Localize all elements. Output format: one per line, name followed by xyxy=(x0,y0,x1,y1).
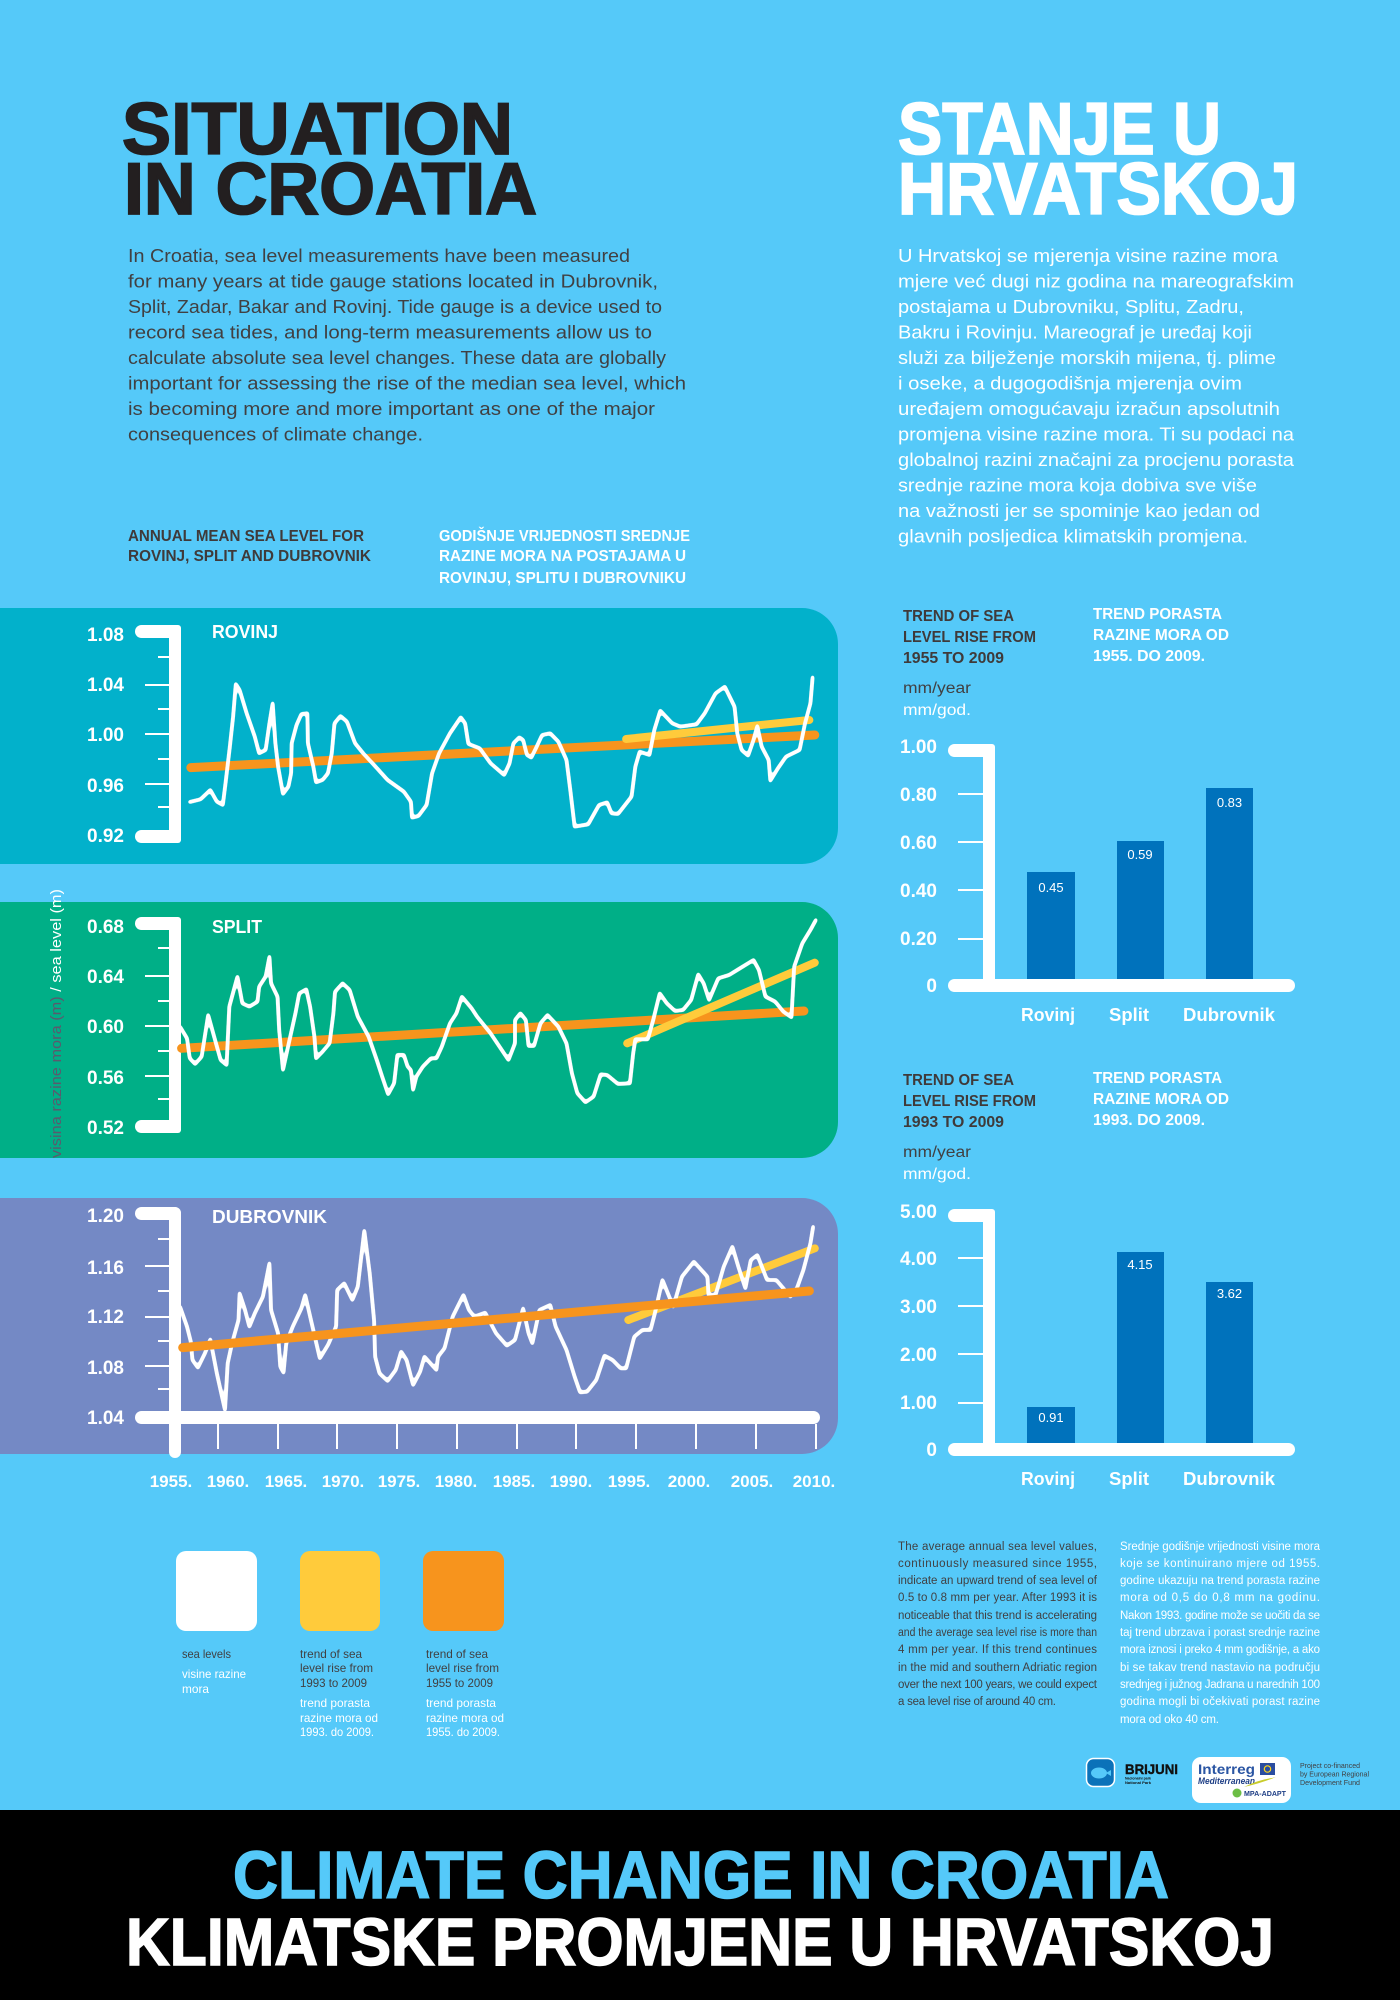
axis labels: Dubrovnik: 1.12 xyxy=(87,1307,124,1328)
y axis labels: 1.00 xyxy=(900,1393,937,1414)
y axis labels: 3.00 xyxy=(900,1297,937,1318)
text block: English summary xyxy=(898,1541,1098,1708)
legend: trend 1955 to 2009: level rise from xyxy=(426,1661,499,1675)
text block: Croatian summary: Srednje godišnje vrijednosti visine mora xyxy=(1120,1541,1321,1553)
axis labels: Dubrovnik: 1.04 xyxy=(87,1408,124,1429)
text block: Croatian introduction: uređajem omogućavaju izračun apsolutnih xyxy=(898,398,1280,419)
text block: Croatian introduction: na važnosti jer se spominje kao jedan od xyxy=(898,500,1260,521)
axis labels: Dubrovnik: 1.20 xyxy=(87,1206,124,1227)
legend: trend 1993 to 2009: 1993. do 2009. xyxy=(300,1725,374,1739)
text block: Croatian introduction: Bakru i Rovinju. Mareograf je uređaj koji xyxy=(898,322,1252,342)
text block: English introduction: for many years at tide gauge stations located in Dubrovnik, xyxy=(128,270,658,292)
unit label: mm per year, second chart xyxy=(903,1144,971,1183)
x axis labels: years: 2005. xyxy=(731,1472,773,1491)
text block: Croatian introduction: glavnih posljedica klimatskih promjena. xyxy=(898,526,1248,546)
heading: annual mean sea level (English) xyxy=(128,528,372,565)
x axis labels: years: 2010. xyxy=(793,1472,835,1491)
panel: Dubrovnik line chart xyxy=(0,1198,838,1458)
legend: sea levels xyxy=(176,1551,257,1696)
text block: Croatian summary: godina mogli bi očekivati porast razine xyxy=(1120,1696,1320,1708)
bar values: 4.15 xyxy=(1127,1257,1153,1272)
text block: Croatian introduction: promjena visine razine mora. Ti su podaci na xyxy=(898,424,1295,444)
logo: Interreg Mediterranean MPA-ADAPT: Mediterranean xyxy=(1198,1776,1255,1786)
text block: English summary: 4 mm per year. If this trend continues xyxy=(898,1644,1097,1656)
legend: trend 1993 to 2009 xyxy=(300,1551,380,1739)
logo: Brijuni National Park xyxy=(1086,1758,1178,1786)
text block: Croatian summary: mora iznosi i preko 4 mm godišnje, a ako xyxy=(1120,1644,1320,1656)
text block: Croatian introduction: globalnoj razini značajni za procjenu porasta xyxy=(898,449,1295,470)
category labels: Split xyxy=(1109,1469,1149,1489)
series: Rovinj trend and sea level lines xyxy=(190,677,815,827)
legend: trend 1993 to 2009: razine mora od xyxy=(300,1711,378,1725)
axis labels: Split: 0.52 xyxy=(87,1118,124,1139)
legend: sea levels: sea levels xyxy=(182,1647,231,1661)
logo: Brijuni National Park: Nacionalni park xyxy=(1125,1776,1152,1780)
panel: Split line chart xyxy=(0,902,838,1158)
bars xyxy=(1027,788,1253,980)
x axis labels: years xyxy=(150,1472,835,1491)
unit label: mm per year, second chart: mm/god. xyxy=(903,1166,971,1183)
heading: annual mean sea level (Croatian) xyxy=(439,527,690,587)
legend: sea levels: visine razine xyxy=(182,1667,246,1681)
text block: English introduction: record sea tides, and long-term measurements allow us to xyxy=(128,322,652,342)
heading: trend 1955 to 2009 (English): 1955 TO 2009 xyxy=(903,650,1004,667)
category labels xyxy=(1021,1005,1276,1025)
y axis labels xyxy=(900,1202,937,1461)
y axis labels: 2.00 xyxy=(900,1345,937,1366)
axis labels: Split: 0.64 xyxy=(87,967,124,988)
bar values: 0.59 xyxy=(1127,847,1153,862)
y axis labels: 0.40 xyxy=(900,881,937,902)
y axis labels: 0.60 xyxy=(900,833,937,854)
legend: trend 1955 to 2009: razine mora od xyxy=(426,1711,504,1725)
legend: trend 1955 to 2009: trend porasta xyxy=(426,1696,496,1710)
legend: sea levels: mora xyxy=(182,1682,209,1696)
title: Stanje u Hrvatskoj: HRVATSKOJ xyxy=(898,149,1298,230)
heading: trend 1955 to 2009 (Croatian): TREND PORASTA xyxy=(1093,606,1222,623)
text: co-financing note: by European Regional xyxy=(1300,1770,1369,1778)
label: Rovinj: ROVINJ xyxy=(212,622,278,642)
text block: Croatian introduction: mjere već dugi niz godina na mareografskim xyxy=(898,270,1294,292)
heading: trend 1955 to 2009 (English): TREND OF SEA xyxy=(903,608,1014,625)
heading: trend 1993 to 2009 (English): LEVEL RISE FROM xyxy=(903,1093,1036,1110)
y axis labels xyxy=(900,737,937,997)
heading: trend 1993 to 2009 (Croatian): TREND PORASTA xyxy=(1093,1070,1222,1087)
heading: annual mean sea level (Croatian): ROVINJU, SPLITU I DUBROVNIKU xyxy=(439,570,686,587)
axis labels: Dubrovnik xyxy=(87,1206,124,1429)
unit label: mm per year: mm/year xyxy=(903,680,971,697)
axis labels: Rovinj xyxy=(87,625,124,847)
text block: Croatian introduction: i oseke, a dugogodišnja mjerenja ovim xyxy=(898,372,1242,394)
axis: Rovinj y axis xyxy=(135,625,181,843)
title: Situation in Croatia xyxy=(122,89,537,230)
y axis labels: 0 xyxy=(926,1440,937,1461)
axis labels: Rovinj: 1.00 xyxy=(87,725,124,746)
category labels xyxy=(1021,1469,1276,1489)
heading: trend 1955 to 2009 (English) xyxy=(903,608,1036,667)
text block: English summary: indicate an upward trend of sea level of xyxy=(898,1575,1098,1587)
legend: trend 1993 to 2009: trend porasta xyxy=(300,1696,370,1710)
unit label: mm per year xyxy=(903,680,971,719)
text: co-financing note xyxy=(1300,1761,1369,1787)
heading: annual mean sea level (English): ROVINJ, SPLIT AND DUBROVNIK xyxy=(128,548,372,565)
title: Stanje u Hrvatskoj: STANJE U xyxy=(898,89,1221,170)
bar values: 0.91 xyxy=(1038,1410,1064,1425)
y axis labels: 1.00 xyxy=(900,737,937,758)
text block: Croatian summary: taj trend ubrzava i porast srednje razine xyxy=(1120,1627,1320,1639)
heading: trend 1993 to 2009 (Croatian) xyxy=(1093,1070,1229,1129)
heading: trend 1993 to 2009 (English): 1993 TO 2009 xyxy=(903,1114,1004,1131)
legend: trend 1955 to 2009: 1955 to 2009 xyxy=(426,1676,493,1690)
text block: English summary: noticeable that this trend is accelerating xyxy=(898,1610,1097,1622)
text block: English summary: and the average sea level rise is more than xyxy=(898,1627,1097,1639)
footer title: Croatian: KLIMATSKE PROMJENE U HRVATSKOJ xyxy=(126,1905,1274,1980)
text block: Croatian introduction: srednje razine mora koja dobiva sve više xyxy=(898,474,1257,496)
bar values xyxy=(1038,1257,1242,1425)
axis labels: Dubrovnik: 1.08 xyxy=(87,1358,124,1379)
axis labels: Rovinj: 1.04 xyxy=(87,675,124,696)
footer title: English: CLIMATE CHANGE IN CROATIA xyxy=(233,1838,1169,1913)
axis labels: Split: 0.68 xyxy=(87,917,124,938)
heading: trend 1955 to 2009 (Croatian): 1955. DO 2009. xyxy=(1093,648,1205,665)
label: Split: SPLIT xyxy=(212,917,262,937)
text block: Croatian summary: mora od 0,5 do 0,8 mm na godinu. xyxy=(1120,1592,1320,1604)
bar values: 3.62 xyxy=(1217,1286,1242,1301)
heading: trend 1955 to 2009 (Croatian) xyxy=(1093,606,1229,665)
axis labels: Rovinj: 0.92 xyxy=(87,826,124,847)
x axis labels: years: 1955. xyxy=(150,1472,192,1491)
heading: annual mean sea level (Croatian): GODIŠNJE VRIJEDNOSTI SREDNJE xyxy=(439,527,690,545)
category labels: Dubrovnik xyxy=(1183,1469,1276,1489)
logo: Interreg Mediterranean MPA-ADAPT xyxy=(1192,1757,1291,1803)
heading: trend 1993 to 2009 (English) xyxy=(903,1072,1036,1131)
title: Situation in Croatia: IN CROATIA xyxy=(124,149,537,230)
text block: Croatian introduction: postajama u Dubrovniku, Splitu, Zadru, xyxy=(898,296,1244,317)
legend: trend 1993 to 2009: trend of sea xyxy=(300,1647,362,1661)
text block: English introduction xyxy=(128,245,686,444)
category labels: Dubrovnik xyxy=(1183,1005,1276,1025)
unit label: mm per year: mm/god. xyxy=(903,702,971,719)
bar values xyxy=(1038,795,1242,895)
axis labels: Split xyxy=(87,917,124,1139)
x axis labels: years: 1980. xyxy=(435,1472,477,1491)
x axis labels: years: 1965. xyxy=(265,1472,307,1491)
axis labels: Rovinj: 0.96 xyxy=(87,776,124,797)
heading: trend 1955 to 2009 (Croatian): RAZINE MORA OD xyxy=(1093,627,1229,644)
logo: Interreg Mediterranean MPA-ADAPT: MPA-ADAPT xyxy=(1244,1789,1286,1798)
text block: English introduction: Split, Zadar, Bakar and Rovinj. Tide gauge is a device used to xyxy=(128,296,662,317)
text block: Croatian introduction xyxy=(898,245,1295,546)
text block: Croatian summary: koje se kontinuirano mjere od 1955. xyxy=(1120,1558,1320,1570)
logo: Brijuni National Park: National Park xyxy=(1125,1780,1152,1785)
text: co-financing note: Project co-financed xyxy=(1300,1761,1360,1770)
x axis labels: years: 1975. xyxy=(378,1472,420,1491)
text block: English introduction: is becoming more and more important as one of the major xyxy=(128,398,655,419)
axis: Split y axis xyxy=(135,917,181,1133)
category labels: Rovinj xyxy=(1021,1469,1075,1489)
text block: English summary: a sea level rise of around 40 cm. xyxy=(898,1696,1056,1708)
axis title: sea level in metres: visina razine mora (m) / sea level (m) xyxy=(48,889,65,1158)
y axis labels: 0 xyxy=(926,976,937,997)
y axis labels: 0.80 xyxy=(900,785,937,806)
x axis labels: years: 1970. xyxy=(322,1472,364,1491)
legend: trend 1955 to 2009: trend of sea xyxy=(426,1647,488,1661)
bar values: 0.83 xyxy=(1217,795,1242,810)
text block: English summary: continuously measured since 1955, xyxy=(898,1558,1097,1570)
footer banner xyxy=(0,1810,1400,2000)
axis: Dubrovnik axes xyxy=(135,1207,820,1458)
text block: Croatian summary xyxy=(1120,1541,1321,1726)
text: co-financing note: Development Fund xyxy=(1300,1778,1360,1787)
heading: annual mean sea level (Croatian): RAZINE MORA NA POSTAJAMA U xyxy=(439,548,686,565)
y axis labels: 5.00 xyxy=(900,1202,937,1223)
text block: English introduction: important for assessing the rise of the median sea level, which xyxy=(128,372,686,394)
x axis labels: years: 1960. xyxy=(207,1472,249,1491)
heading: trend 1955 to 2009 (English): LEVEL RISE FROM xyxy=(903,629,1036,646)
text block: Croatian summary: mora od oko 40 cm. xyxy=(1120,1714,1219,1726)
bars xyxy=(1027,1252,1253,1444)
text block: Croatian summary: Nakon 1993. godine može se uočiti da se xyxy=(1120,1610,1320,1622)
text block: English summary: 0.5 to 0.8 mm per year. After 1993 it is xyxy=(898,1592,1097,1604)
logo: Brijuni National Park: BRIJUNI xyxy=(1125,1762,1178,1777)
legend: trend 1955 to 2009: 1955. do 2009. xyxy=(426,1725,500,1739)
bar chart: trend 1993 to 2009 xyxy=(900,1202,1295,1489)
panel: Rovinj line chart xyxy=(0,608,838,864)
y axis labels: 0.20 xyxy=(900,929,937,950)
title: Situation in Croatia: SITUATION xyxy=(122,89,513,170)
bar chart: trend 1955 to 2009 xyxy=(900,737,1295,1025)
axis labels: Split: 0.56 xyxy=(87,1068,124,1089)
heading: trend 1993 to 2009 (Croatian): 1993. DO 2009. xyxy=(1093,1112,1205,1129)
series: Dubrovnik trend and sea level lines xyxy=(180,1227,815,1410)
x axis labels: years: 1990. xyxy=(550,1472,592,1491)
text block: English introduction: In Croatia, sea level measurements have been measured xyxy=(128,245,630,266)
heading: annual mean sea level (English): ANNUAL MEAN SEA LEVEL FOR xyxy=(128,528,364,545)
x axis labels: years: 1995. xyxy=(608,1472,650,1491)
category labels: Split xyxy=(1109,1005,1149,1025)
legend: trend 1955 to 2009 xyxy=(423,1551,504,1739)
bar values: 0.45 xyxy=(1038,880,1064,895)
legend: trend 1993 to 2009: level rise from xyxy=(300,1661,373,1675)
axis labels: Split: 0.60 xyxy=(87,1017,124,1038)
series: Split trend and sea level lines xyxy=(180,920,816,1102)
category labels: Rovinj xyxy=(1021,1005,1075,1025)
x axis labels: years: 2000. xyxy=(668,1472,710,1491)
text block: Croatian summary: godine ukazuju na trend porasta razine xyxy=(1120,1575,1320,1587)
text block: Croatian introduction: služi za bilježenje morskih mijena, tj. plime xyxy=(898,347,1276,368)
label: Dubrovnik: DUBROVNIK xyxy=(212,1207,327,1227)
heading: trend 1993 to 2009 (Croatian): RAZINE MORA OD xyxy=(1093,1091,1229,1108)
axis labels: Dubrovnik: 1.16 xyxy=(87,1258,124,1279)
text block: Croatian introduction: U Hrvatskoj se mjerenja visine razine mora xyxy=(898,245,1279,266)
text block: English introduction: consequences of climate change. xyxy=(128,424,423,444)
y axis labels: 4.00 xyxy=(900,1249,937,1270)
text block: Croatian summary: srednjeg i južnog Jadrana u narednih 100 xyxy=(1120,1679,1320,1691)
text block: English summary: over the next 100 years, we could expect xyxy=(898,1679,1098,1691)
text block: English summary: The average annual sea level values, xyxy=(898,1541,1097,1553)
unit label: mm per year, second chart: mm/year xyxy=(903,1144,971,1161)
heading: trend 1993 to 2009 (English): TREND OF SEA xyxy=(903,1072,1014,1089)
logo: Interreg Mediterranean MPA-ADAPT: Interreg xyxy=(1198,1761,1255,1777)
axis labels: Rovinj: 1.08 xyxy=(87,625,124,646)
legend: trend 1993 to 2009: 1993 to 2009 xyxy=(300,1676,367,1690)
x axis labels: years: 1985. xyxy=(493,1472,535,1491)
axes xyxy=(948,744,1295,992)
axes xyxy=(948,1209,1295,1456)
text block: Croatian summary: bi se takav trend nastavio na području xyxy=(1120,1662,1320,1674)
text block: English summary: in the mid and southern Adriatic region xyxy=(898,1662,1097,1674)
title: Stanje u Hrvatskoj xyxy=(898,89,1298,230)
text block: English introduction: calculate absolute sea level changes. These data are globally xyxy=(128,347,667,368)
